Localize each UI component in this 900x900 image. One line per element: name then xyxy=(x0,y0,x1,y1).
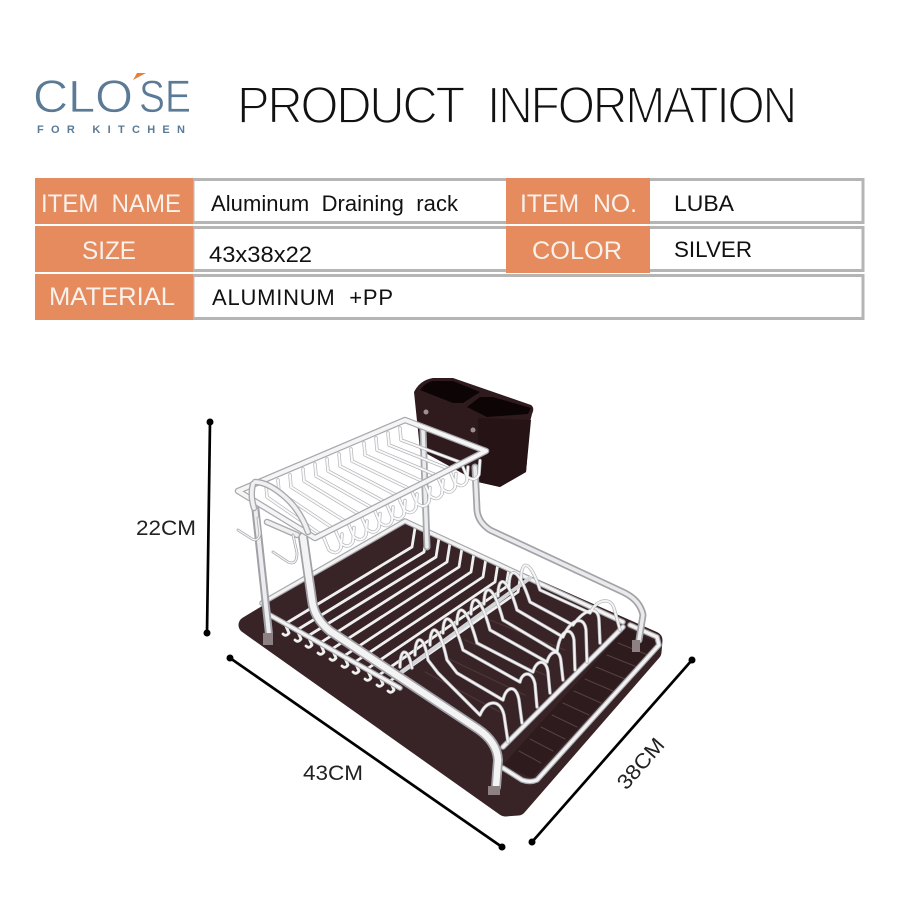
drip tray xyxy=(247,530,657,808)
value: size: 43x38x22 xyxy=(209,242,312,267)
label: material xyxy=(35,274,193,320)
label: color xyxy=(506,226,650,273)
label: item no: ITEM NO. xyxy=(520,190,637,218)
basket wires xyxy=(266,428,480,553)
row 3 box xyxy=(193,276,863,318)
dimension: length: 43CM xyxy=(303,762,363,785)
upper basket xyxy=(238,420,486,563)
title xyxy=(237,77,795,135)
spec table xyxy=(35,178,863,320)
dimension: length xyxy=(226,654,506,850)
value: item name: Aluminum Draining rack xyxy=(211,191,459,216)
logo: SE xyxy=(139,71,191,122)
handle xyxy=(252,482,308,535)
dimension: height: 22CM xyxy=(136,517,196,540)
logo xyxy=(33,71,191,136)
label: size xyxy=(35,226,193,272)
row 1 box xyxy=(193,180,863,222)
value: material: ALUMINUM +PP xyxy=(212,285,393,310)
label: item no xyxy=(506,178,650,224)
label: item name xyxy=(35,178,193,224)
logo: FOR KITCHEN xyxy=(37,124,185,136)
label: size: SIZE xyxy=(82,237,136,265)
divider rail xyxy=(400,578,530,673)
dimension: width: 38CM xyxy=(613,734,669,794)
row 2 box xyxy=(193,228,863,270)
logo: CLO xyxy=(33,71,133,122)
label: material: MATERIAL xyxy=(49,283,175,311)
value: item no: LUBA xyxy=(674,191,734,216)
front tube and leg xyxy=(303,537,500,795)
plate comb wires xyxy=(400,565,620,742)
label: color: COLOR xyxy=(532,237,622,265)
title: PRODUCT xyxy=(237,77,465,135)
rear basket post xyxy=(423,430,427,547)
title: INFORMATION xyxy=(487,77,795,135)
utensil caddy xyxy=(414,378,533,487)
product illustration: dish rack xyxy=(238,378,659,808)
rear support arm xyxy=(475,467,643,652)
dimension: height xyxy=(136,418,214,636)
value: color: SILVER xyxy=(674,237,752,262)
left leg xyxy=(255,505,273,645)
lower rack wires xyxy=(283,528,521,692)
basket rim xyxy=(238,420,486,538)
lower frame rails xyxy=(262,521,659,782)
hooks xyxy=(238,518,297,563)
dimension: width xyxy=(528,656,696,846)
label: item name: ITEM NAME xyxy=(41,190,181,218)
